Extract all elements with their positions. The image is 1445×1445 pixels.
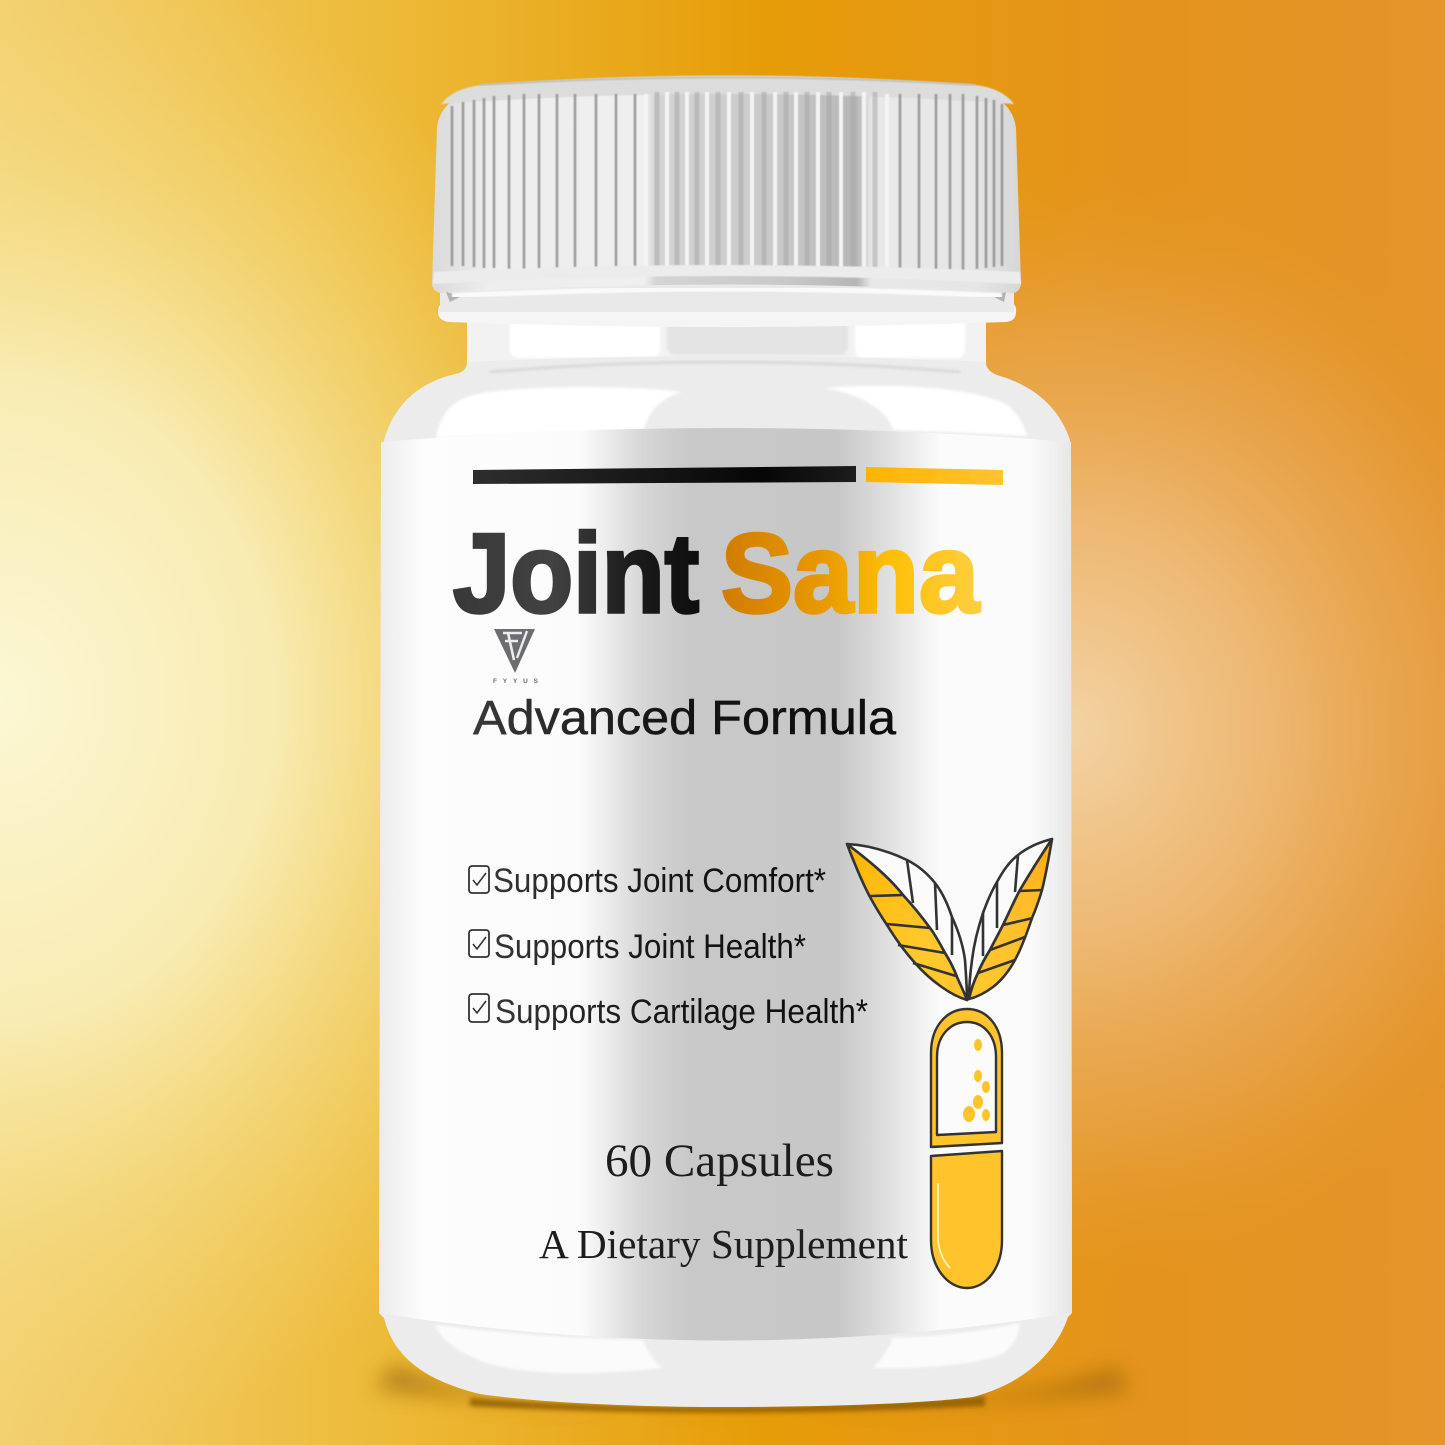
icon: leaves <box>847 839 1052 1000</box>
yellow bar <box>866 467 1003 485</box>
capsule count: 60 Capsules <box>605 1135 834 1187</box>
base highlights <box>435 1323 1020 1373</box>
neck ring <box>438 302 1016 327</box>
clear band between cap and ring <box>440 282 1014 312</box>
cap ridges: center grooves <box>657 92 875 272</box>
bottle neck <box>467 305 986 380</box>
cap ridges: dark grooves on sides <box>452 94 1002 271</box>
supplement line: A Dietary Supplement <box>539 1221 909 1267</box>
cap <box>432 76 1021 312</box>
top bars <box>473 466 1003 485</box>
logo: FYYUS <box>493 629 539 685</box>
cap ridges: center highlights <box>646 92 887 270</box>
bottle <box>379 76 1072 1407</box>
benefits list <box>469 862 868 1031</box>
benefit 1: Supports Joint Comfort* <box>493 862 826 900</box>
benefit 2: Supports Joint Health* <box>494 928 806 966</box>
title: Joint Sana <box>453 511 980 636</box>
subtitle: Advanced Formula <box>473 692 896 745</box>
left leaf <box>847 844 967 1000</box>
label <box>379 428 1072 1340</box>
black bar <box>473 466 856 484</box>
title: Joint Sana: Joint <box>453 511 699 636</box>
icon: capsule <box>931 1009 1002 1288</box>
neck shoulder shading <box>490 362 960 372</box>
bottle ground shadow <box>375 1365 1130 1413</box>
right leaf <box>969 839 1052 999</box>
shoulder highlights <box>436 386 1027 438</box>
capsule top half <box>931 1009 1002 1147</box>
benefit 3: Supports Cartilage Health* <box>495 993 868 1031</box>
bottle body silhouette <box>379 356 1072 1407</box>
title: Joint Sana: Sana <box>721 511 980 636</box>
capsule bottom half <box>931 1151 1002 1288</box>
capsule granules <box>963 1039 990 1122</box>
logo: FYYUS: FYYUS <box>493 678 539 685</box>
